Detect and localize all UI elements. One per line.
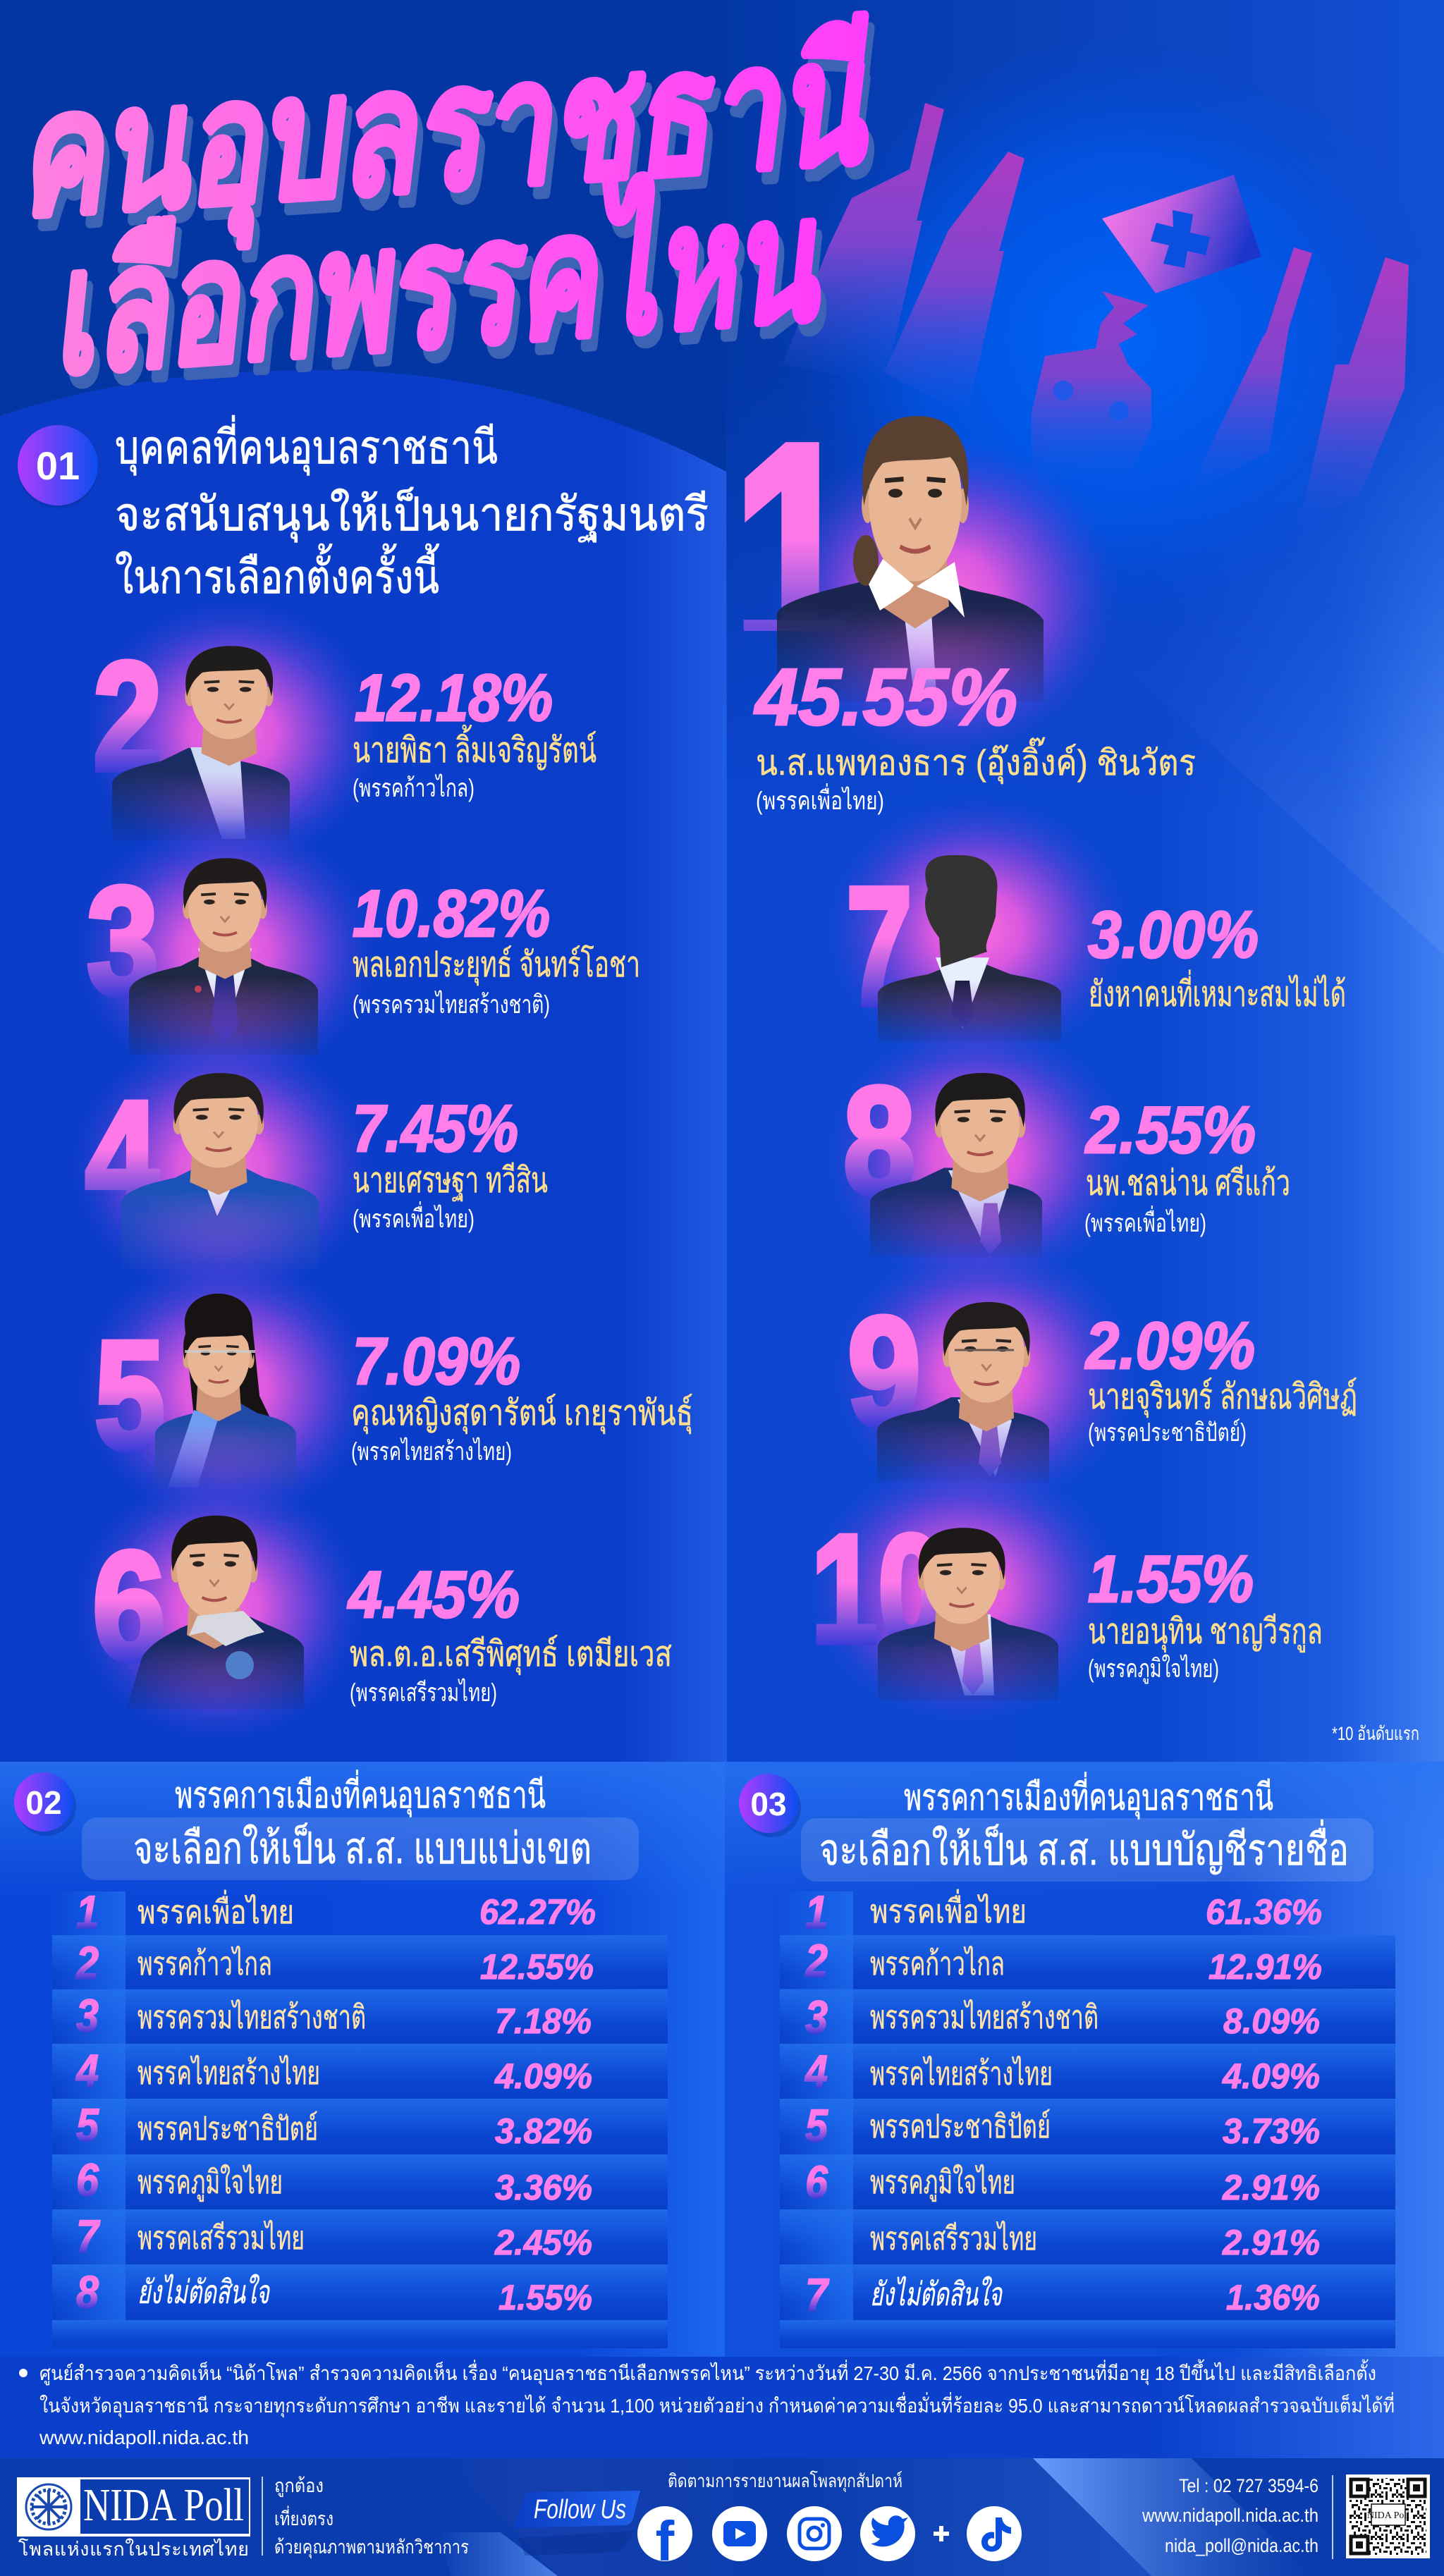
- footer bar: [0, 2458, 1444, 2576]
- contact details: www.nidapoll.nida.ac.th: [1142, 2505, 1318, 2526]
- table rows 02: พรรคไทยสร้างไทย: [137, 2054, 320, 2091]
- panel 03 heading: [801, 1772, 1373, 1882]
- table rows 02: พรรคประชาธิปัตย์: [137, 2110, 318, 2147]
- logo: NIDA Poll: NIDA Poll: [83, 2479, 244, 2531]
- follow us tag: [513, 2491, 640, 2556]
- table rows 03: 2.91%: [1222, 2168, 1320, 2207]
- table rows 03: ยังไม่ตัดสินใจ: [870, 2276, 1003, 2312]
- icon: tiktok: [967, 2506, 1022, 2561]
- panel 03: party-list MPs: [725, 1762, 1444, 2357]
- badge 03: 03: [750, 1786, 787, 1822]
- title: เลือกพรรคไหน: [49, 176, 829, 421]
- table rows 02: [52, 1886, 668, 2348]
- motto: ถูกต้อง: [274, 2475, 324, 2497]
- QR code: NIDA Poll: [1367, 2510, 1409, 2521]
- table rows 03: 61.36%: [1206, 1892, 1322, 1932]
- name 1: น.ส.แพทองธาร (อุ๊งอิ๊งค์) ชินวัตร: [756, 737, 1196, 784]
- value 6: 4.45%: [347, 1557, 520, 1631]
- table rows 02: ยังไม่ตัดสินใจ: [137, 2274, 270, 2310]
- table rows 02: พรรครวมไทยสร้างชาติ: [137, 1999, 366, 2035]
- icon: instagram: [787, 2506, 842, 2561]
- panel 02 heading: จะเลือกให้เป็น ส.ส. แบบแบ่งเขต: [133, 1822, 592, 1873]
- table rows 02: 4.09%: [494, 2056, 592, 2096]
- survey methodology note: [0, 2357, 1444, 2458]
- table rows 02: 4: [75, 2044, 99, 2097]
- value 2: 12.18%: [355, 661, 553, 735]
- party 8: (พรรคเพื่อไทย): [1084, 1206, 1206, 1237]
- portrait 5: [155, 1294, 296, 1488]
- icon: facebook: [637, 2506, 692, 2572]
- party 1: (พรรคเพื่อไทย): [756, 783, 884, 815]
- rank 8: Cholnan: [825, 1022, 1290, 1290]
- rank number 1: 1: [733, 382, 857, 720]
- title: เลือกพรรคไหน: [44, 164, 824, 409]
- table rows 03: พรรครวมไทยสร้างชาติ: [870, 1999, 1099, 2035]
- table rows 02: 1.55%: [498, 2278, 592, 2317]
- portrait 4: [121, 1073, 319, 1269]
- table rows 03: 2.91%: [1222, 2223, 1320, 2262]
- panel 03 heading: พรรคการเมืองที่คนอุบลราชธานี: [904, 1772, 1273, 1820]
- rank number 6: 6: [92, 1519, 166, 1693]
- table rows 03: พรรคก้าวไกล: [870, 1945, 1005, 1982]
- motto: ด้วยคุณภาพตามหลักวิชาการ: [274, 2537, 469, 2559]
- table rows 03: พรรคประชาธิปัตย์: [870, 2108, 1051, 2145]
- portrait 3: [129, 858, 318, 1055]
- party 6: (พรรคเสรีรวมไทย): [350, 1678, 497, 1707]
- logo: NIDA Poll: [17, 2477, 250, 2537]
- panel 02: constituency MPs: [0, 1762, 725, 2357]
- table rows 03: 1: [805, 1886, 828, 1938]
- rank 5: Sudarat: [78, 1255, 693, 1523]
- icon: youtube: [712, 2506, 767, 2561]
- rank 4: Srettha: [71, 1033, 548, 1301]
- table rows 03: 4: [804, 2045, 828, 2097]
- follow caption: ติดตามการรายงานผลโพลทุกสัปดาห์: [668, 2470, 902, 2492]
- rank number 5: 5: [94, 1308, 165, 1482]
- table rows 03: 3: [805, 1991, 828, 2043]
- table rows 03: 3.73%: [1223, 2111, 1320, 2151]
- rank 9: Jurin: [832, 1241, 1357, 1509]
- icon: twitter: [860, 2506, 915, 2561]
- rank 7: no suitable candidate: [825, 797, 1346, 1065]
- value 10: 1.55%: [1088, 1542, 1254, 1616]
- icon: candle tower silhouettes: [783, 103, 1409, 529]
- name 4: นายเศรษฐา ทวีสิน: [353, 1160, 548, 1201]
- portrait 2: [112, 646, 290, 841]
- follow us tag: Follow Us: [534, 2495, 626, 2525]
- table rows 02: พรรคเพื่อไทย: [137, 1889, 294, 1930]
- section 01 heading: ในการเลือกตั้งครั้งนี้: [115, 544, 440, 603]
- top header background with temple and ballot artwork: [0, 0, 1444, 811]
- table rows 02: 1: [76, 1886, 99, 1938]
- table rows 02: พรรคก้าวไกล: [137, 1945, 272, 1982]
- portrait 9: [877, 1302, 1049, 1483]
- portrait 8: [870, 1073, 1042, 1257]
- rank number 4: 4: [85, 1069, 159, 1242]
- survey methodology note: www.nidapoll.nida.ac.th: [39, 2427, 249, 2448]
- table rows 03: 7: [805, 2269, 830, 2321]
- section 01 heading: บุคคลที่คนอุบลราชธานี: [115, 415, 498, 476]
- logo tagline: โพลแห่งแรกในประเทศไทย: [18, 2538, 249, 2560]
- table rows 02: 5: [76, 2099, 99, 2151]
- rank 6: Seripisut: [74, 1473, 672, 1741]
- table rows 02: 8: [76, 2266, 99, 2318]
- table rows 02: พรรคเสรีรวมไทย: [137, 2219, 305, 2256]
- table rows 02: 2: [75, 1937, 99, 1989]
- table rows 02: พรรคภูมิใจไทย: [137, 2164, 283, 2202]
- icon: plus: [934, 2526, 949, 2541]
- panel 02 heading: พรรคการเมืองที่คนอุบลราชธานี: [175, 1770, 546, 1817]
- rank 1: Paetongtarn: [743, 416, 1196, 815]
- value 9: 2.09%: [1084, 1308, 1255, 1382]
- table rows 03: 5: [805, 2099, 828, 2152]
- rank 2: Pita: [85, 599, 596, 867]
- motto: เที่ยงตรง: [274, 2506, 334, 2529]
- party 2: (พรรคก้าวไกล): [353, 773, 475, 802]
- badge 02: [14, 1772, 76, 1836]
- table rows 02: 2.45%: [494, 2223, 592, 2262]
- badge 03: [739, 1774, 801, 1837]
- party 3: (พรรครวมไทยสร้างชาติ): [353, 990, 550, 1019]
- value 8: 2.55%: [1084, 1093, 1256, 1167]
- value 1: 45.55%: [754, 653, 1017, 742]
- icon: facebook: f: [656, 2510, 675, 2572]
- icon: emblem: [26, 2484, 71, 2529]
- table rows 03: 12.91%: [1209, 1947, 1322, 1987]
- table rows 03: พรรคเพื่อไทย: [870, 1889, 1027, 1930]
- value 7: 3.00%: [1088, 897, 1259, 971]
- contact details: [1142, 2475, 1318, 2556]
- portrait 10: [878, 1528, 1058, 1701]
- badge 01: [18, 425, 98, 508]
- rank number 8: 8: [843, 1055, 915, 1228]
- table rows 02: 3.82%: [495, 2111, 592, 2151]
- value 5: 7.09%: [353, 1324, 520, 1398]
- table rows 03: [780, 1886, 1395, 2348]
- panel 02 heading: [82, 1770, 639, 1880]
- portrait 7: silhouette: [878, 855, 1061, 1042]
- QR code: [1346, 2474, 1430, 2558]
- rank number 9: 9: [848, 1284, 921, 1458]
- name 6: พล.ต.อ.เสรีพิศุทธ์ เตมียเวส: [350, 1634, 672, 1675]
- table rows 03: 6: [805, 2156, 828, 2208]
- table rows 02: 7.18%: [495, 2001, 592, 2041]
- table rows 03: พรรคเสรีรวมไทย: [870, 2220, 1037, 2257]
- icon: ballot box with cross: [1102, 175, 1261, 293]
- name 8: นพ.ชลน่าน ศรีแก้ว: [1086, 1163, 1290, 1203]
- value 3: 10.82%: [353, 876, 550, 950]
- motto: [274, 2475, 469, 2559]
- party 9: (พรรคประชาธิปัตย์): [1088, 1418, 1247, 1447]
- rank number 2: 2: [93, 630, 162, 803]
- rank 10: Anutin: [807, 1456, 1323, 1724]
- party 5: (พรรคไทยสร้างไทย): [351, 1437, 512, 1466]
- portrait 1: [777, 416, 1044, 701]
- rank number 3: 3: [87, 854, 159, 1028]
- title: [11, 6, 883, 421]
- name 3: พลเอกประยุทธ์ จันทร์โอชา: [353, 945, 640, 986]
- name 10: นายอนุทิน ชาญวีรกูล: [1088, 1612, 1323, 1652]
- badge 02: 02: [25, 1784, 62, 1821]
- table rows 03: 4.09%: [1222, 2056, 1320, 2096]
- icon: temple silhouette: [1032, 291, 1151, 479]
- section 01 heading: [115, 415, 709, 603]
- name 5: คุณหญิงสุดารัตน์ เกยุราพันธุ์: [351, 1393, 693, 1434]
- table rows 02: 7: [76, 2210, 101, 2262]
- table rows 02: 62.27%: [479, 1892, 596, 1932]
- rank number 7: 7: [846, 852, 912, 1041]
- name 2: นายพิธา ลิ้มเจริญรัตน์: [353, 725, 596, 770]
- portrait 6: [126, 1516, 304, 1710]
- table rows 03: 2: [804, 1934, 828, 1987]
- section 01 heading: จะสนับสนุนให้เป็นนายกรัฐมนตรี: [115, 486, 709, 543]
- table rows 03: พรรคไทยสร้างไทย: [870, 2055, 1053, 2092]
- table rows 02: 12.55%: [480, 1947, 594, 1987]
- table rows 02: 3: [76, 1989, 99, 2042]
- value 4: 7.45%: [353, 1091, 518, 1165]
- badge 01: 01: [36, 443, 80, 488]
- rank 3: Prayut: [74, 818, 640, 1086]
- table rows 03: พรรคภูมิใจไทย: [870, 2164, 1015, 2202]
- party 4: (พรรคเพื่อไทย): [353, 1201, 475, 1233]
- party 10: (พรรคภูมิใจไทย): [1088, 1654, 1219, 1684]
- table rows 02: 6: [76, 2154, 99, 2206]
- title: คนอุบลราชธานี: [17, 18, 883, 272]
- rank number 10: 10: [811, 1502, 945, 1676]
- contact details: Tel : 02 727 3594-6: [1179, 2475, 1318, 2496]
- table rows 03: 1.36%: [1226, 2278, 1320, 2317]
- table rows 03: 8.09%: [1223, 2001, 1320, 2041]
- table rows 02: 3.36%: [495, 2168, 592, 2207]
- contact details: nida_poll@nida.ac.th: [1165, 2535, 1318, 2556]
